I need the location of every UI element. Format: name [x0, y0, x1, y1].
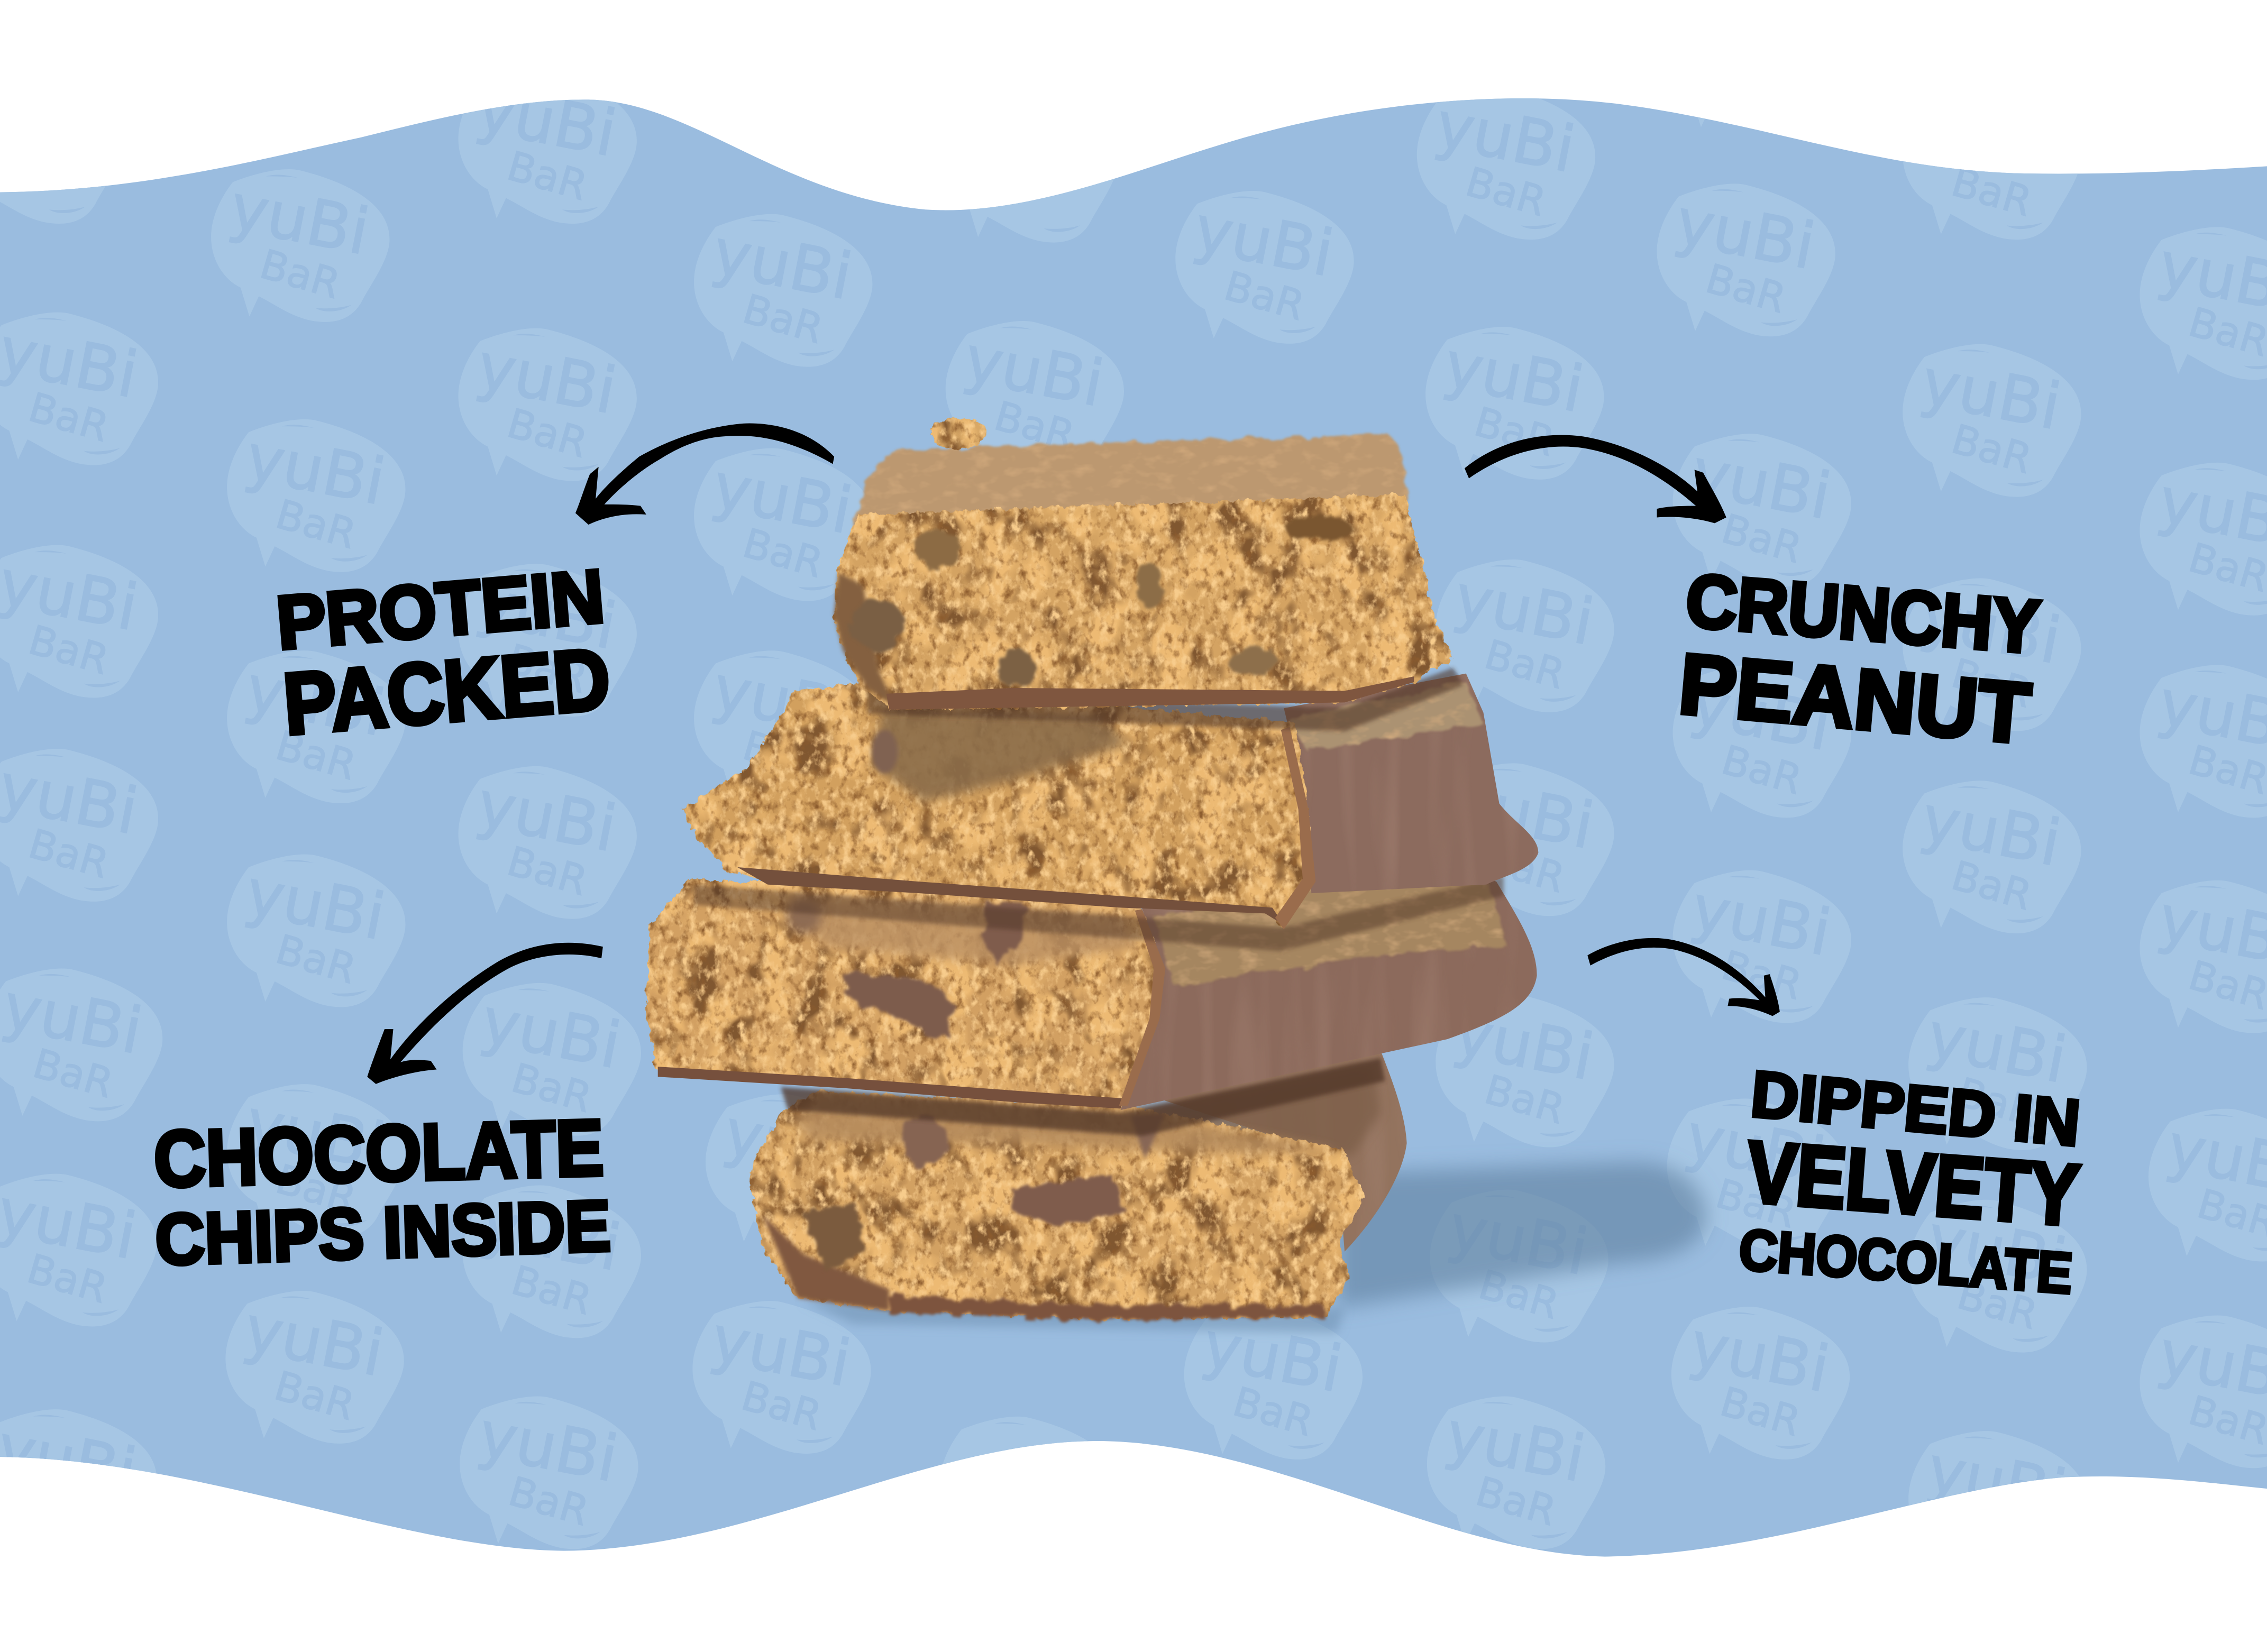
bar 3: coated side — [1120, 853, 1537, 1110]
logo watermark pattern: yuBi — [240, 1085, 391, 1185]
bar 1 top: crumb face — [834, 494, 1453, 710]
logo watermark pattern: BaR — [506, 1054, 597, 1122]
logo watermark pattern: BaR — [738, 520, 828, 588]
logo watermark pattern: BaR — [989, 393, 1080, 460]
logo watermark pattern: BaR — [1479, 835, 1570, 902]
logo watermark pattern: yuBi — [471, 72, 622, 171]
logo watermark pattern: yuBi — [1443, 1191, 1594, 1290]
logo watermark pattern: BaR — [1946, 159, 2037, 226]
logo watermark pattern: yuBi — [471, 767, 622, 866]
bar 1 top: crumb chunk — [931, 418, 986, 449]
logo watermark pattern: BaR — [1479, 631, 1570, 699]
logo watermark pattern: BaR — [1479, 1066, 1570, 1134]
label: dipped in velvety chocolate: VELVETY — [1744, 1123, 2082, 1244]
logo watermark pattern: BaR — [502, 143, 592, 210]
logo watermark pattern: yuBi — [707, 449, 858, 548]
logo watermark pattern: yuBi — [1916, 782, 2067, 881]
logo watermark pattern: BaR — [502, 400, 592, 467]
logo watermark pattern: BaR — [1946, 852, 2037, 920]
logo watermark pattern: BaR — [1952, 1069, 2043, 1136]
logo watermark pattern: yuBi — [1440, 1397, 1591, 1497]
logo watermark pattern: yuBi — [1439, 328, 1589, 427]
logo watermark pattern: BaR — [506, 1257, 597, 1325]
logo watermark pattern: BaR — [1946, 650, 2037, 718]
logo watermark pattern: BaR — [1460, 159, 1551, 226]
logo watermark pattern: yuBi — [1670, 185, 1821, 284]
logo watermark pattern: BaR — [23, 617, 114, 684]
label: dipped in velvety chocolate: DIPPED IN — [1748, 1058, 2083, 1160]
logo watermark pattern: yuBi — [476, 984, 626, 1083]
bar 1 top: coated top surface — [853, 434, 1408, 538]
logo watermark pattern: BaR — [1219, 263, 1310, 330]
contact shadow under bar 2 — [694, 876, 1504, 951]
logo watermark pattern: BaR — [1952, 1271, 2043, 1339]
logo watermark pattern: yuBi — [706, 1302, 856, 1401]
bar 2: coated side — [1284, 674, 1538, 893]
label: protein packed: PROTEIN — [273, 554, 607, 665]
label: crunchy peanut: PEANUT — [1676, 636, 2034, 761]
logo watermark pattern: yuBi — [958, 322, 1109, 421]
logo watermark pattern: yuBi — [1922, 1201, 2072, 1300]
bar 3: lighter top of coating — [1154, 867, 1506, 986]
logo watermark pattern: yuBi — [1189, 192, 1339, 291]
logo watermark pattern: yuBi — [1916, 579, 2067, 678]
logo watermark pattern: BaR — [1716, 506, 1807, 573]
logo watermark pattern: BaR — [738, 722, 828, 790]
logo watermark pattern: yuBi — [1430, 88, 1580, 187]
logo watermark pattern: BaR — [271, 722, 361, 790]
label: crunchy peanut: CRUNCHY — [1683, 558, 2043, 669]
label: chocolate chips inside: CHOCOLATE — [153, 1103, 605, 1204]
logo watermark pattern: yuBi — [1686, 871, 1836, 970]
logo watermark pattern: yuBi — [239, 1292, 389, 1391]
logo watermark pattern: yuBi — [1449, 996, 1599, 1095]
label: protein packed: PACKED — [280, 630, 614, 752]
logo watermark pattern: yuBi — [1197, 1308, 1348, 1407]
logo watermark pattern: BaR — [1946, 416, 2037, 483]
logo watermark pattern: yuBi — [1686, 666, 1836, 765]
logo watermark pattern: yuBi — [707, 651, 858, 751]
arrow: crunchy peanut — [1465, 435, 1726, 523]
logo watermark pattern: BaR — [269, 1362, 360, 1430]
logo watermark pattern: yuBi — [1916, 88, 2067, 187]
logo watermark pattern: yuBi — [1916, 345, 2067, 444]
label: protein packed — [273, 554, 614, 752]
logo watermark pattern: BaR — [504, 1468, 594, 1536]
logo watermark pattern: yuBi — [471, 329, 622, 428]
logo watermark pattern: yuBi — [1449, 764, 1599, 864]
logo watermark pattern: BaR — [271, 1156, 361, 1223]
logo watermark pattern: BaR — [736, 1373, 827, 1440]
logo watermark pattern: BaR — [1474, 1261, 1564, 1329]
logo watermark pattern: yuBi — [224, 170, 375, 270]
logo watermark pattern: BaR — [1711, 1170, 1801, 1238]
logo watermark pattern: yuBi — [1922, 1432, 2072, 1531]
logo watermark pattern: yuBi — [1686, 435, 1836, 534]
bar 2 details — [737, 708, 1315, 929]
logo watermark pattern: BaR — [1701, 255, 1791, 323]
label: crunchy peanut — [1676, 558, 2043, 761]
logo watermark pattern: yuBi — [1680, 1099, 1831, 1199]
bar 4 details — [762, 1094, 1337, 1319]
logo watermark pattern: yuBi — [718, 1095, 870, 1195]
logo watermark pattern: yuBi — [0, 969, 148, 1069]
logo watermark pattern: BaR — [1715, 1379, 1806, 1446]
logo watermark pattern: yuBi — [707, 215, 858, 314]
contact shadow under bar 1 — [867, 668, 1463, 731]
logo watermark pattern: BaR — [23, 821, 114, 888]
logo watermark pattern: BaR — [1469, 398, 1560, 466]
logo watermark pattern: BaR — [28, 1040, 118, 1108]
logo watermark pattern: yuBi — [473, 1397, 624, 1497]
label: dipped in velvety chocolate: CHOCOLATE — [1737, 1217, 2074, 1306]
contact shadow under bar 3 — [781, 1058, 1385, 1136]
logo watermark pattern: yuBi — [1684, 1308, 1835, 1407]
logo watermark pattern: yuBi — [1449, 561, 1599, 660]
bar 3 details — [658, 896, 1165, 1108]
logo watermark pattern: yuBi — [1922, 998, 2072, 1098]
logo watermark pattern: BaR — [1716, 942, 1807, 1009]
logo watermark pattern: yuBi — [471, 565, 622, 664]
bar 1 details — [834, 515, 1414, 710]
bar 3: crumb face — [646, 879, 1163, 1107]
ground shadow — [802, 1162, 1706, 1333]
logo watermark pattern: yuBi — [240, 651, 391, 751]
bar 4 bottom: coated side — [1113, 1043, 1407, 1252]
logo watermark pattern: yuBi — [240, 855, 391, 955]
logo watermark pattern: BaR — [271, 491, 361, 558]
logo watermark pattern: yuBi — [240, 420, 391, 519]
logo watermark pattern: BaR — [271, 926, 361, 994]
bar 4 bottom: broken crumb face — [749, 1091, 1364, 1319]
label: chocolate chips inside — [153, 1103, 612, 1280]
logo watermark pattern: BaR — [1716, 737, 1807, 804]
logo watermark pattern: BaR — [1228, 1379, 1318, 1446]
product photo: stack of four bars — [646, 418, 1538, 1319]
logo watermark pattern: BaR — [502, 838, 592, 905]
arrow: chocolate chips — [367, 943, 603, 1084]
logo watermark pattern: BaR — [738, 286, 828, 353]
logo watermark pattern: BaR — [23, 384, 114, 452]
bar 2: crumb face — [682, 682, 1311, 928]
arrow: protein packed — [575, 424, 834, 525]
logo watermark pattern: yuBi — [476, 1186, 626, 1286]
bar 4 bottom: darker upper coating — [1128, 1062, 1381, 1157]
arrow: dipped in chocolate — [1587, 938, 1780, 1016]
logo watermark pattern: BaR — [1470, 1468, 1561, 1536]
logo watermark pattern: BaR — [502, 636, 592, 703]
logo watermark pattern: BaR — [255, 241, 345, 308]
logo watermark pattern: BaR — [22, 1245, 113, 1313]
logo watermark pattern: BaR — [749, 1166, 840, 1233]
label: chocolate chips inside: CHIPS INSIDE — [154, 1185, 612, 1280]
bar 2: lighter top of coating — [1287, 682, 1483, 751]
label: dipped in velvety chocolate — [1737, 1058, 2083, 1306]
